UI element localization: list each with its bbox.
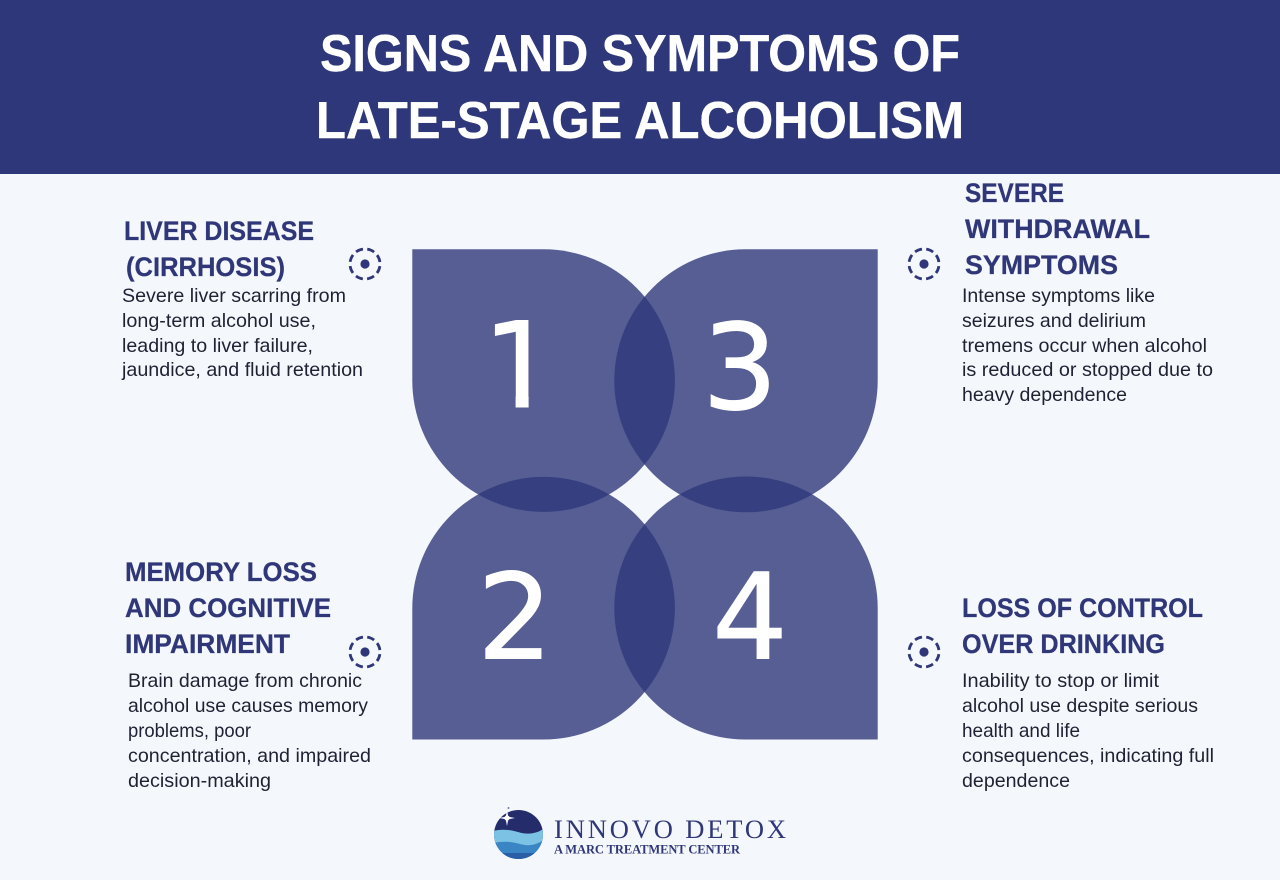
icon: night sky and wave globe — [494, 807, 543, 859]
text: withdrawal description: is reduced or stopped due to — [962, 359, 1213, 381]
number 4: 4 — [712, 550, 788, 688]
text: memory loss description: concentration, and impaired — [128, 745, 371, 767]
number 2: 2 — [477, 550, 553, 688]
text: loss of control description: consequences, indicating full — [962, 745, 1214, 767]
text: loss of control description: Inability to stop or limit — [962, 670, 1160, 692]
text: withdrawal description: tremens occur when alcohol — [962, 335, 1207, 357]
heading: loss of control over drinking: LOSS OF CONTROL — [962, 593, 1203, 623]
heading: memory loss and cognitive impairment: AND COGNITIVE — [125, 593, 331, 623]
text: memory loss description: problems, poor — [128, 720, 251, 742]
heading: liver disease — [124, 216, 314, 282]
heading: severe withdrawal symptoms: WITHDRAWAL — [965, 214, 1150, 244]
text: withdrawal description: heavy dependence — [962, 384, 1127, 406]
overlapping petal diagram — [412, 249, 878, 740]
logo tagline: A MARC TREATMENT CENTER — [554, 842, 741, 856]
icon: dashed target — [909, 249, 939, 279]
text: liver disease description: leading to liver failure, — [122, 335, 313, 357]
petal 4 — [614, 476, 878, 740]
heading: memory loss and cognitive impairment: MEMORY LOSS — [125, 557, 317, 587]
heading: loss of control over drinking — [962, 593, 1203, 659]
text: memory loss description: alcohol use causes memory — [128, 695, 368, 717]
block: liver disease — [121, 216, 380, 381]
block: loss of control — [909, 593, 1214, 792]
block: severe withdrawal symptoms — [909, 178, 1213, 406]
title: SIGNS AND SYMPTOMS OF — [320, 25, 960, 83]
petal 2 — [412, 477, 675, 740]
number 3: 3 — [702, 300, 778, 438]
heading: memory loss and cognitive impairment — [125, 557, 331, 659]
text: loss of control description — [962, 670, 1214, 792]
title — [316, 25, 964, 150]
block: memory loss — [125, 557, 380, 792]
logo wordmark: INNOVO DETOX — [554, 814, 786, 844]
text: loss of control description: health and life — [962, 720, 1080, 742]
title: LATE-STAGE ALCOHOLISM — [316, 92, 964, 150]
header banner — [0, 0, 1280, 174]
heading: liver disease: (CIRRHOSIS) — [126, 252, 285, 282]
text: loss of control description: dependence — [962, 770, 1070, 792]
heading: severe withdrawal symptoms — [965, 178, 1150, 280]
heading: liver disease: LIVER DISEASE — [124, 216, 314, 246]
text: liver disease description — [121, 285, 363, 381]
heading: memory loss and cognitive impairment: IMPAIRMENT — [125, 629, 290, 659]
text: liver disease description: Severe liver scarring from — [122, 285, 346, 307]
text: liver disease description: jaundice, and fluid retention — [121, 359, 363, 381]
text: loss of control description: alcohol use despite serious — [962, 695, 1198, 717]
text: withdrawal description: seizures and delirium — [962, 310, 1146, 332]
icon: dashed target — [909, 637, 939, 667]
icon: dashed target — [350, 249, 380, 279]
petal 3 — [614, 249, 878, 512]
text: memory loss description — [128, 670, 371, 792]
text: memory loss description: decision-making — [128, 770, 271, 792]
heading: severe withdrawal symptoms: SYMPTOMS — [965, 250, 1118, 280]
icon: dashed target — [350, 637, 380, 667]
text: memory loss description: Brain damage from chronic — [128, 670, 362, 692]
number 1: 1 — [482, 298, 558, 436]
text: withdrawal description: Intense symptoms like — [962, 285, 1155, 307]
heading: loss of control over drinking: OVER DRINKING — [962, 629, 1165, 659]
logo: Innovo Detox — [490, 807, 786, 862]
text: liver disease description: long-term alcohol use, — [122, 310, 316, 332]
petal 1 — [412, 249, 675, 512]
text: withdrawal description — [962, 285, 1213, 406]
heading: severe withdrawal symptoms: SEVERE — [965, 178, 1064, 208]
